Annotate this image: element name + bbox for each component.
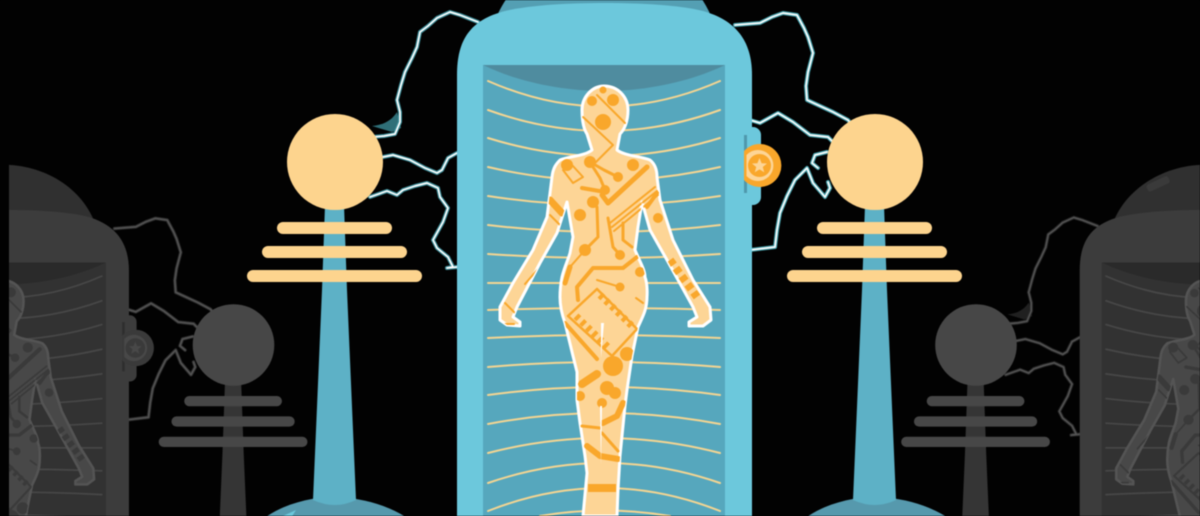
lightning arcs: left side [370,12,478,268]
energy rings [488,81,720,516]
faded pod scene: left [0,165,307,516]
circuit traces [505,86,697,488]
star button [744,144,781,187]
side control slit [744,135,747,193]
pod inner chamber [483,65,725,516]
leg gap highlights [600,323,604,465]
human figure with circuit pattern [500,86,711,516]
main pod scene [247,0,962,516]
side control bump [735,127,761,205]
body silhouette [500,86,711,516]
pod dome [494,0,714,24]
faded pod scene: right [901,165,1200,516]
Tesla coil: left [247,114,422,516]
chamber top shade [483,65,725,91]
Tesla coil: right [787,114,962,516]
pod body [457,3,752,516]
lightning arcs: right side [735,13,852,250]
black margin strip on the left edge [0,0,9,516]
memory chip [568,289,637,356]
